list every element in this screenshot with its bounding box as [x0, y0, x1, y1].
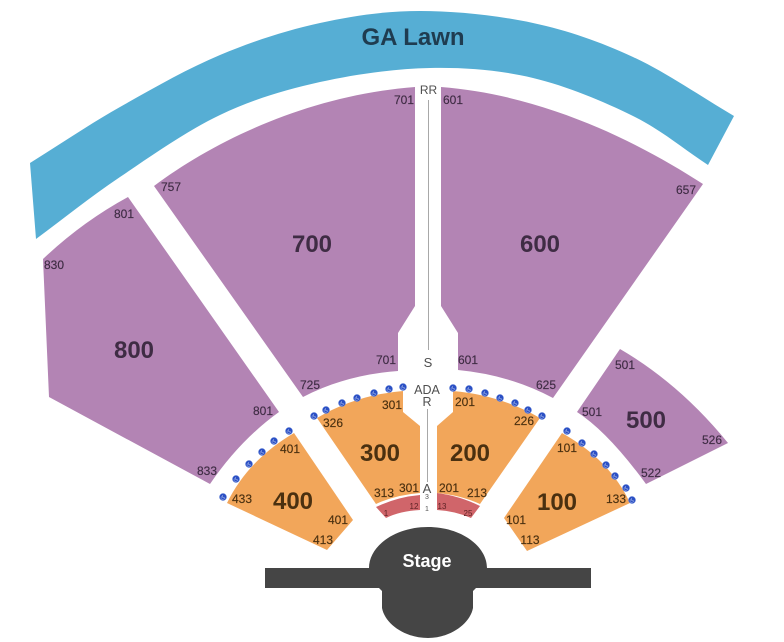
section: 600: 600 [520, 231, 560, 258]
section: 300: 313 [374, 486, 394, 500]
section: 300 [317, 391, 420, 504]
section: 700: 701 [394, 93, 414, 107]
aisle labels [414, 83, 441, 513]
section: 700: 757 [161, 180, 181, 194]
section: 700: 725 [300, 378, 320, 392]
section: 600: 601 [458, 353, 478, 367]
section: 200: 226 [514, 414, 534, 428]
section: 500: 500 [626, 407, 666, 434]
section: 500: 522 [641, 466, 661, 480]
section: 500 [577, 349, 728, 484]
section: 400: 400 [273, 488, 313, 515]
section: 400: 401 [328, 513, 348, 527]
section: 600 [441, 87, 703, 398]
section: 100 [504, 433, 630, 551]
section: 600: 657 [676, 183, 696, 197]
aisle labels: RR [420, 83, 437, 97]
section: 300: 300 [360, 440, 400, 467]
section: 700: 701 [376, 353, 396, 367]
section: 400: 433 [232, 492, 252, 506]
section: 600: 625 [536, 378, 556, 392]
section: 200: 213 [467, 486, 487, 500]
section: front right: 25 [464, 509, 473, 518]
section: 100: 101 [506, 513, 526, 527]
section: front right: 13 [438, 502, 447, 511]
section: 800 [43, 197, 279, 484]
aisle labels: 1 [425, 506, 429, 513]
section: 200 [437, 391, 540, 504]
section: 800: 830 [44, 258, 64, 272]
section: 700 [154, 87, 415, 397]
section: 300: 326 [323, 416, 343, 430]
section: 800: 833 [197, 464, 217, 478]
section: 500: 501 [615, 358, 635, 372]
section: 400: 401 [280, 442, 300, 456]
section: 300: 301 [399, 481, 419, 495]
section: 100: 100 [537, 489, 577, 516]
accessibility markers [219, 383, 636, 504]
stage: Stage [402, 551, 452, 571]
section: 800: 801 [253, 404, 273, 418]
stage [265, 527, 591, 638]
section: 500: 501 [582, 405, 602, 419]
section: 800: 801 [114, 207, 134, 221]
section: 100: 113 [520, 533, 540, 547]
section: 700: 700 [292, 231, 332, 258]
section: 300: 301 [382, 398, 402, 412]
section: GA Lawn: GA Lawn [361, 24, 465, 51]
section: 100: 101 [557, 441, 577, 455]
section: 400: 413 [313, 533, 333, 547]
aisle labels: R [422, 395, 432, 409]
aisle labels: S [424, 355, 433, 370]
section: 400 [227, 433, 353, 550]
section: front left: 1 [384, 509, 389, 518]
aisle labels: ADA [414, 383, 441, 397]
section: 800: 800 [114, 337, 154, 364]
section: 100: 133 [606, 492, 626, 506]
section: front left [376, 495, 420, 518]
section: 200: 200 [450, 440, 490, 467]
section: 500: 526 [702, 433, 722, 447]
aisle labels: A [423, 481, 432, 496]
section: 200: 201 [455, 395, 475, 409]
section: front right [437, 493, 480, 518]
section: front left: 12 [410, 502, 419, 511]
section: 200: 201 [439, 481, 459, 495]
aisle labels: 3 [425, 494, 429, 501]
section: 600: 601 [443, 93, 463, 107]
